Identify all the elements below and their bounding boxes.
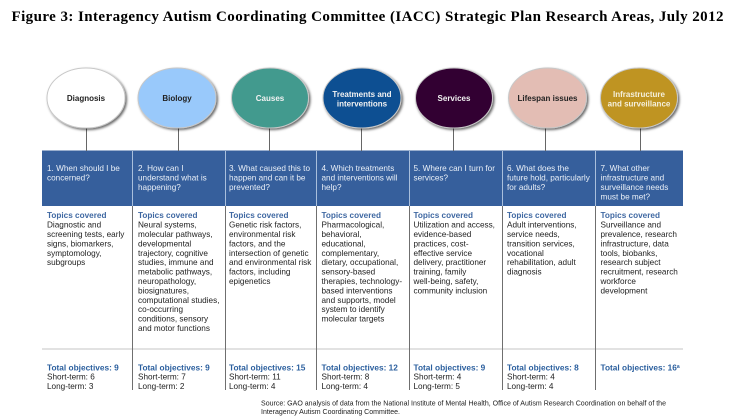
objectives 5: Short-term: 4 — [414, 373, 462, 382]
column 7: Infrastructure and surveillance — [600, 68, 680, 372]
objectives 2: Long-term: 2 — [138, 382, 185, 391]
objectives 2: Total objectives: 9 — [138, 362, 210, 372]
topics heading 5: Topics covered — [414, 211, 473, 220]
topics list 4: educational, — [322, 239, 366, 248]
question 6: for adults? — [507, 183, 546, 192]
question 3: happen and can it be — [229, 174, 306, 182]
topics list 2: computational studies, — [138, 296, 219, 305]
question 3: 3. What caused this to — [229, 164, 310, 173]
topics list 5: training, family — [414, 268, 467, 277]
objectives 5: Long-term: 5 — [414, 382, 460, 391]
question 2: understand what is — [138, 174, 207, 182]
topics list 2: conditions, sensory — [138, 315, 209, 324]
topics list 6: rehabilitation, adult — [507, 258, 576, 267]
topics list 6: vocational — [507, 249, 544, 258]
column 5: Services — [412, 68, 495, 391]
topics list 5: evidence-based — [414, 230, 472, 239]
topics list 6: diagnosis — [507, 268, 542, 277]
oval label: Infrastructure and surveillance: and surveillance — [608, 100, 671, 108]
topics list 5: community inclusion — [414, 286, 488, 295]
topics heading 2: Topics covered — [138, 211, 197, 220]
question 3: prevented? — [229, 183, 270, 192]
topics list 2: Neural systems, — [138, 221, 197, 230]
topics list 3: factors, including — [229, 268, 291, 277]
objectives 4: Long-term: 4 — [322, 382, 368, 391]
oval label: Causes: Causes — [256, 94, 285, 103]
oval label: Treatments and interventions: interventions — [337, 100, 388, 108]
source note: Source: GAO analysis of data from the National Institute of Mental Health, Office of Autism Research Coordination on behalf of the — [261, 398, 666, 407]
objectives 2: Short-term: 7 — [138, 373, 186, 382]
question 5: services? — [414, 174, 449, 182]
topics heading 4: Topics covered — [322, 211, 381, 220]
question 1: 1. When should I be — [47, 164, 120, 173]
topics list 5: practices, cost- — [414, 239, 469, 248]
topics list 4: behavioral, — [322, 230, 362, 239]
topics list 4: and supports, model — [322, 296, 396, 305]
objectives 6: Long-term: 4 — [507, 382, 554, 391]
topics list 7: tools, biobanks, — [600, 249, 657, 258]
column 3: Causes — [229, 68, 312, 391]
blue question band — [42, 150, 683, 206]
objectives 3: Total objectives: 15 — [229, 362, 306, 372]
topics list 2: developmental — [138, 239, 191, 248]
topics list 7: recruitment, research — [600, 268, 678, 277]
topics list 6: service needs, — [507, 230, 560, 239]
oval: Biology — [138, 68, 216, 128]
topics list 2: metabolic pathways, — [138, 268, 212, 277]
topics list 4: based interventions — [322, 286, 393, 295]
objectives 6: Total objectives: 8 — [507, 362, 579, 372]
topics heading 7: Topics covered — [600, 211, 660, 220]
objectives 1: Total objectives: 9 — [47, 362, 119, 372]
topics list 4: sensory-based — [322, 268, 376, 277]
oval: Infrastructure and surveillance — [600, 68, 678, 128]
topics heading 1: Topics covered — [47, 211, 106, 220]
oval: Causes — [232, 68, 308, 128]
oval: Diagnosis — [47, 68, 125, 128]
topics list 2: trajectory, cognitive — [138, 249, 208, 258]
question 7: must be met? — [600, 192, 651, 202]
topics heading 3: Topics covered — [229, 211, 288, 220]
source note — [261, 398, 666, 416]
oval: Services — [416, 68, 492, 128]
oval: Treatments and interventions — [323, 68, 401, 128]
question 2: 2. How can I — [138, 164, 184, 173]
topics list 1: symptomology, — [47, 249, 101, 258]
question 4: and interventions will — [322, 174, 398, 182]
column 1: Diagnosis — [47, 68, 125, 391]
topics list 2: studies, immune and — [138, 258, 214, 267]
objectives 3: Short-term: 11 — [229, 373, 281, 382]
objectives 4: Short-term: 8 — [322, 373, 370, 382]
question 6: 6. What does the — [507, 164, 569, 173]
question 1: concerned? — [47, 174, 90, 182]
topics list 5: effective service — [414, 249, 472, 258]
column 4: Treatments and interventions — [322, 68, 402, 391]
topics list 4: molecular targets — [322, 315, 384, 324]
column 2: Biology — [138, 68, 219, 391]
topics list 4: therapies, technology- — [322, 277, 402, 286]
topics list 3: epigenetics — [229, 277, 270, 286]
objectives 4: Total objectives: 12 — [322, 362, 398, 372]
objectives 1: Short-term: 6 — [47, 373, 95, 382]
question 7: surveillance needs — [600, 183, 668, 192]
oval label: Infrastructure and surveillance: Infrastructure — [613, 90, 666, 99]
topics list 4: Pharmacological, — [322, 221, 384, 230]
topics list 5: Utilization and access, — [414, 221, 495, 230]
objectives 7: a — [677, 364, 680, 370]
topics list 6: Adult interventions, — [507, 221, 577, 230]
topics list 7: Surveillance and — [600, 221, 661, 230]
oval label: Biology: Biology — [162, 94, 192, 103]
topics list 4: complementary, — [322, 249, 379, 258]
objectives 3: Long-term: 4 — [229, 382, 276, 391]
topics list 1: signs, biomarkers, — [47, 239, 113, 248]
question 4: help? — [322, 183, 342, 192]
topics list 1: screening tests, early — [47, 230, 125, 239]
topics list 3: intersection of genetic — [229, 249, 309, 258]
topics list 5: well-being, safety, — [412, 277, 478, 286]
oval: Lifespan issues — [508, 68, 586, 128]
oval label: Services: Services — [438, 94, 471, 103]
topics list 3: environmental risk — [229, 230, 296, 239]
topics list 7: workforce — [600, 277, 636, 286]
topics list 7: prevalence, research — [600, 230, 677, 239]
question 5: 5. Where can I turn for — [414, 164, 495, 173]
question 7: infrastructure and — [600, 174, 665, 182]
question 6: future hold, particularly — [507, 174, 591, 182]
source note: Interagency Autism Coordinating Committee. — [261, 407, 400, 416]
topics list 7: research subject — [600, 258, 661, 267]
topics list 3: and environmental risk — [229, 258, 312, 267]
topics list 1: subgroups — [47, 258, 85, 267]
objectives 1: Long-term: 3 — [47, 382, 94, 391]
question 2: happening? — [138, 183, 181, 192]
topics list 2: neuropathology, — [138, 277, 196, 286]
question 7: 7. What other — [600, 164, 650, 173]
column 6: Lifespan issues — [507, 68, 591, 391]
title: Figure 3: Interagency Autism Coordinating Committee (IACC) Strategic Plan Research Areas, July 2012 — [12, 9, 724, 25]
topics list 3: Genetic risk factors, — [229, 221, 301, 230]
topics list 2: biosignatures, — [138, 286, 189, 295]
objectives 6: Short-term: 4 — [507, 373, 555, 382]
oval label: Lifespan issues: Lifespan issues — [517, 94, 578, 103]
question 4: 4. Which treatments — [322, 164, 394, 173]
topics list 2: and motor functions — [138, 324, 210, 333]
topics list 2: molecular pathways, — [138, 230, 213, 239]
topics list 6: transition services, — [507, 239, 575, 248]
topics list 4: system to identify — [322, 305, 386, 314]
topics heading 6: Topics covered — [507, 211, 566, 220]
topics list 7: infrastructure, data — [600, 239, 669, 248]
objectives 5: Total objectives: 9 — [414, 362, 486, 372]
topics list 3: factors, and the — [229, 239, 286, 248]
topics list 5: delivery, practitioner — [414, 258, 486, 267]
topics list 1: Diagnostic and — [47, 221, 102, 230]
oval label: Diagnosis: Diagnosis — [67, 94, 106, 103]
topics list 2: co-occurring — [138, 305, 183, 314]
topics list 7: development — [600, 286, 648, 295]
oval label: Treatments and interventions: Treatments and — [332, 90, 392, 99]
topics list 4: dietary, occupational, — [322, 258, 398, 267]
objectives 7: Total objectives: 16 — [600, 362, 677, 372]
